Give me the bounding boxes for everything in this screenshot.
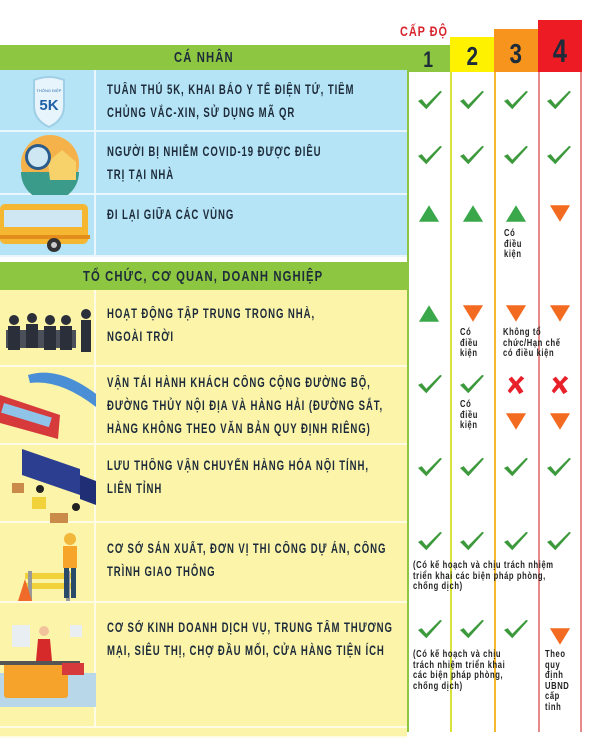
level headers: 3 xyxy=(510,38,522,69)
markers: điều xyxy=(504,238,522,250)
row3 xyxy=(419,205,439,222)
icon: bus xyxy=(0,195,96,255)
band: tổ chức: TỔ CHỨC, CƠ QUAN, DOANH NGHIỆP xyxy=(83,268,324,285)
icon: home xyxy=(0,132,96,193)
band: cá nhân xyxy=(0,45,407,70)
row: gatherings: NGOÀI TRỜI xyxy=(107,329,174,344)
row7 checks xyxy=(418,532,442,550)
row: commerce: MẠI, SIÊU THỊ, CHỢ ĐẦU MỐI, CỬA HÀNG TIỆN ÍCH xyxy=(107,643,385,658)
row: 5K: CHỦNG VẮC-XIN, SỬ DỤNG MÃ QR xyxy=(107,105,295,120)
row: travel: ĐI LẠI GIỮA CÁC VÙNG xyxy=(107,207,234,222)
row2 checks xyxy=(418,146,442,164)
row: home treatment: TRỊ TẠI NHÀ xyxy=(107,167,174,182)
row: gatherings: HOẠT ĐỘNG TẬP TRUNG TRONG NHÀ, xyxy=(107,306,315,321)
markers: Có xyxy=(504,228,515,239)
markers: chống dịch) xyxy=(413,680,463,692)
markers: Không tổ xyxy=(503,327,541,338)
markers: (Có kế hoạch và chịu trách nhiệm xyxy=(413,560,554,571)
row: gatherings xyxy=(0,290,407,367)
markers: Có xyxy=(460,399,471,410)
icon: meeting xyxy=(0,290,96,365)
row: home treatment xyxy=(0,132,407,195)
icon: 5K shield: THÔNG ĐIỆP xyxy=(37,88,62,93)
row: goods xyxy=(0,445,407,523)
row: commerce: CƠ SỞ KINH DOANH DỊCH VỤ, TRUNG TÂM THƯƠNG xyxy=(107,620,393,635)
markers: các biện pháp phòng, xyxy=(413,670,503,681)
row5 xyxy=(418,374,442,394)
icon: construction xyxy=(0,523,96,601)
heading: cấp độ: CẤP ĐỘ xyxy=(400,23,448,39)
row: goods: LƯU THÔNG VẬN CHUYỂN HÀNG HÓA NỘI TỈNH, xyxy=(107,458,369,473)
row: production: CƠ SỞ SẢN XUẤT, ĐƠN VỊ THI CÔNG DỰ ÁN, CÔNG xyxy=(107,541,386,556)
row: home treatment: NGƯỜI BỊ NHIỄM COVID-19 ĐƯỢC ĐIỀU xyxy=(107,144,321,159)
row: production xyxy=(0,523,407,603)
level headers: 2 xyxy=(466,41,478,71)
markers: chức/Hạn chế xyxy=(503,338,561,348)
row1 checks xyxy=(418,90,442,110)
column backgrounds xyxy=(407,72,582,732)
markers: triển khai các biện pháp phòng, xyxy=(413,570,546,582)
markers: kiện xyxy=(504,249,522,260)
row6 checks xyxy=(418,458,442,476)
row: public transport xyxy=(0,367,407,445)
row: 5K: TUÂN THỦ 5K, KHAI BÁO Y TẾ ĐIỆN TỬ, TIÊM xyxy=(107,82,354,97)
markers: Theo xyxy=(545,649,566,660)
row: goods: LIÊN TỈNH xyxy=(107,481,162,496)
level headers: 4 xyxy=(553,33,567,69)
markers: điều xyxy=(460,338,478,348)
markers xyxy=(413,90,571,712)
markers: UBND xyxy=(545,680,569,692)
icon: shop xyxy=(0,603,96,726)
level headers xyxy=(407,20,582,72)
icon: 5K shield: 5K xyxy=(39,97,59,114)
row: travel xyxy=(0,195,407,257)
markers: tỉnh xyxy=(545,702,561,712)
icon: bus stop xyxy=(0,367,96,443)
band: cá nhân: CÁ NHÂN xyxy=(174,49,233,66)
markers: điều xyxy=(460,410,478,420)
row: commerce xyxy=(0,603,407,728)
markers: kiện xyxy=(460,348,478,359)
row: public transport: ĐƯỜNG THỦY NỘI ĐỊA VÀ HÀNG HẢI (ĐƯỜNG SẮT, xyxy=(107,398,383,413)
markers: kiện xyxy=(460,420,478,431)
row: 5K xyxy=(0,70,407,132)
icon: truck xyxy=(0,445,96,521)
markers: chống dịch) xyxy=(413,581,463,592)
band: tổ chức xyxy=(0,262,407,290)
row: production: TRÌNH GIAO THÔNG xyxy=(107,564,215,579)
row4 xyxy=(419,305,439,322)
markers: trách nhiệm triển khai xyxy=(413,660,505,670)
icon: 5K shield xyxy=(0,70,96,130)
markers: quy xyxy=(545,660,560,670)
markers: cấp xyxy=(545,691,560,702)
row: public transport: HÀNG KHÔNG THEO VĂN BẢN QUY ĐỊNH RIÊNG) xyxy=(107,421,371,436)
markers: Có xyxy=(460,327,471,338)
markers: (Có kế hoạch và chịu xyxy=(413,649,501,660)
markers: định xyxy=(545,670,563,681)
row8 xyxy=(418,620,442,638)
level headers: 1 xyxy=(424,47,433,72)
row: public transport: VẬN TẢI HÀNH KHÁCH CÔNG CỘNG ĐƯỜNG BỘ, xyxy=(107,375,371,390)
markers: có điều kiện xyxy=(503,348,554,359)
